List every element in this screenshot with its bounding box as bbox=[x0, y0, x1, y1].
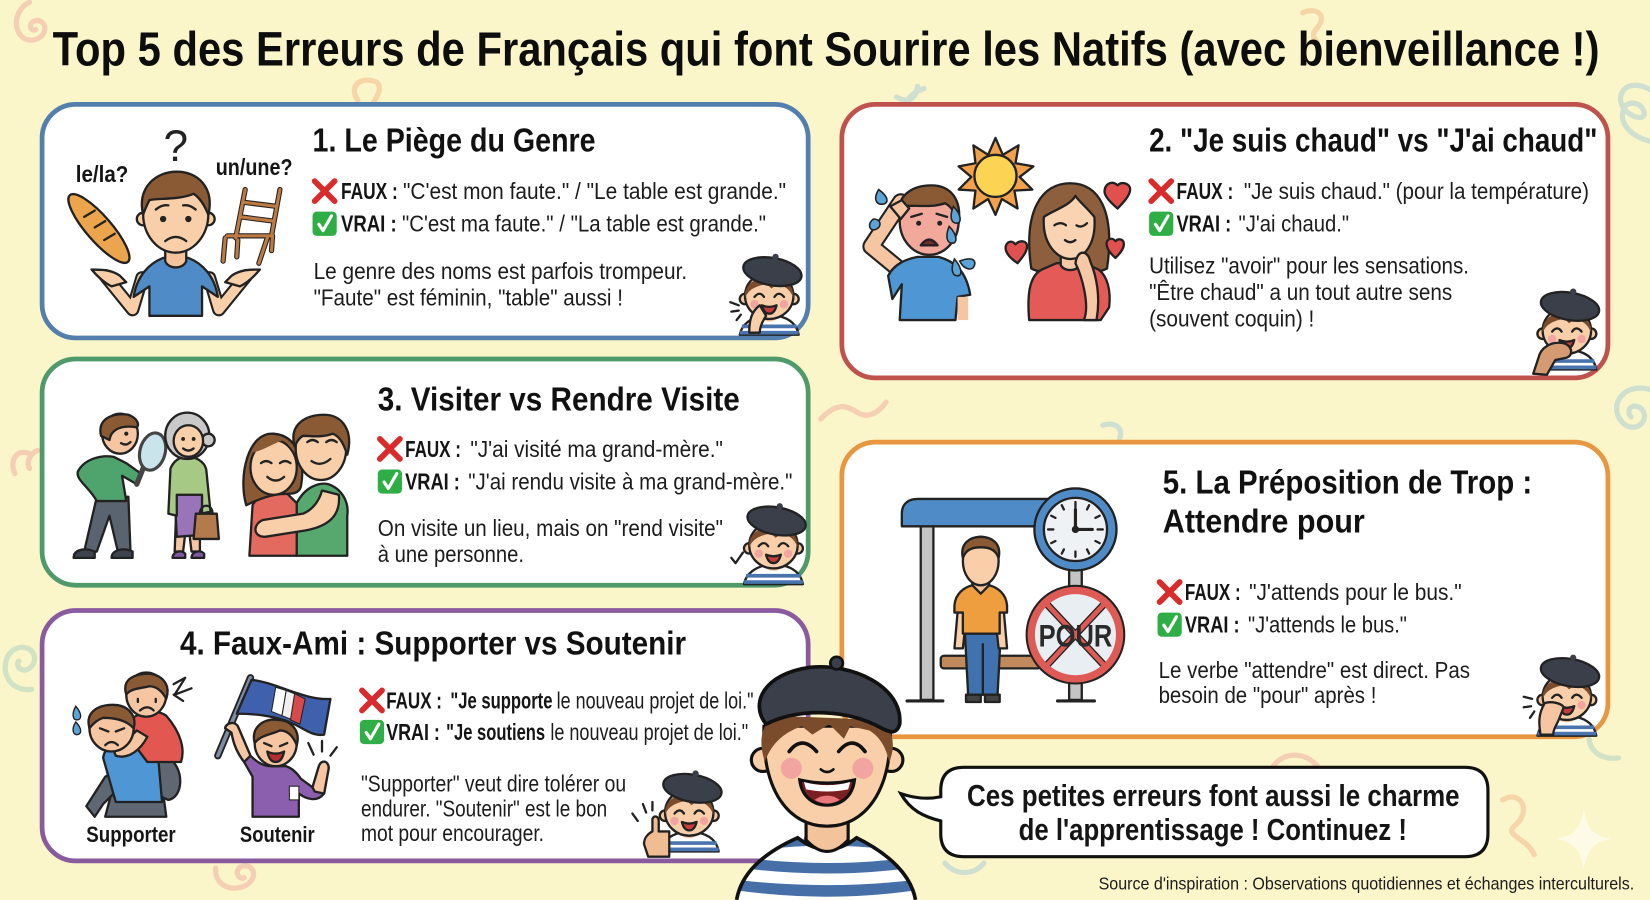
explanation: card 5: besoin de "pour" après ! bbox=[1159, 682, 1376, 708]
explanation: card 5 bbox=[1159, 657, 1470, 708]
faux row: card 5 bbox=[1160, 579, 1462, 605]
illustration: couple hugging bbox=[243, 415, 349, 556]
heading: card 5: Attendre pour bbox=[1163, 504, 1365, 541]
vrai row: card 2 bbox=[1149, 211, 1349, 237]
illustration: confused man with baguette and chair: ? bbox=[163, 122, 188, 171]
panel: 5. La Préposition de Trop bbox=[842, 442, 1608, 737]
explanation: card 2: Utilisez "avoir" pour les sensations. bbox=[1149, 253, 1469, 279]
explanation: card 1: Le genre des noms est parfois trompeur. bbox=[314, 258, 687, 284]
vrai row: card 4: VRAI : bbox=[386, 719, 440, 745]
panel: 4. Faux-Ami : Supporter vs Soutenir bbox=[42, 610, 808, 861]
explanation: card 4 bbox=[361, 770, 626, 846]
faux row: card 2: "Je suis chaud." (pour la température) bbox=[1244, 178, 1589, 204]
speech bubble bbox=[901, 767, 1488, 857]
explanation: card 4: endurer. "Soutenir" est le bon bbox=[361, 796, 607, 822]
illustration: hot sweating boy bbox=[870, 185, 975, 320]
vrai row: card 5: VRAI : bbox=[1185, 612, 1240, 638]
faux row: card 3: "J'ai visité ma grand-mère." bbox=[470, 436, 723, 462]
illustration: confused man with baguette and chair: un/une? bbox=[216, 154, 293, 180]
icon: crossed-out POUR sign bbox=[1027, 586, 1124, 684]
illustration: blushing girl with hearts bbox=[1006, 183, 1130, 320]
mini character: card 5 bbox=[1524, 654, 1601, 736]
panel: 3. Visiter vs Rendre Visite bbox=[42, 359, 808, 585]
explanation: card 2: "Être chaud" a un tout autre sens bbox=[1149, 279, 1452, 305]
explanation: card 4: mot pour encourager. bbox=[361, 820, 544, 846]
faux row: card 3: FAUX : bbox=[405, 436, 461, 462]
speech bubble: de l'apprentissage ! Continuez ! bbox=[1019, 813, 1407, 847]
speech bubble: Ces petites erreurs font aussi le charme bbox=[967, 779, 1460, 813]
faux row: card 4: FAUX : bbox=[386, 687, 442, 713]
vrai row: card 4: le nouveau projet de loi." bbox=[550, 719, 748, 745]
vrai row: card 5: "J'attends le bus." bbox=[1248, 612, 1407, 638]
label: Soutenir: Soutenir bbox=[240, 822, 315, 847]
explanation: card 1 bbox=[314, 258, 687, 310]
faux row: card 4 bbox=[362, 687, 753, 713]
panel: 2. Je suis chaud vs J'ai chaud bbox=[842, 104, 1608, 378]
faux row: card 1: FAUX : bbox=[341, 178, 398, 204]
faux row: card 3 bbox=[380, 436, 723, 462]
icon: clock bbox=[1034, 488, 1116, 570]
illustration: confused man with baguette and chair: le/la? bbox=[76, 161, 128, 187]
vrai row: card 1: "C'est ma faute." / "La table est grande." bbox=[402, 211, 766, 237]
heading: card 5 bbox=[1163, 465, 1532, 541]
heading: card 1: 1. Le Piège du Genre bbox=[313, 123, 596, 160]
explanation: card 2 bbox=[1149, 253, 1469, 331]
explanation: card 3 bbox=[378, 515, 723, 567]
vrai row: card 3: "J'ai rendu visite à ma grand-mère." bbox=[468, 468, 792, 494]
explanation: card 4: "Supporter" veut dire tolérer ou bbox=[361, 770, 626, 796]
label: Supporter: Supporter bbox=[86, 822, 176, 847]
vrai row: card 2: VRAI : bbox=[1176, 211, 1231, 237]
explanation: card 3: On visite un lieu, mais on "rend visite" bbox=[378, 515, 723, 541]
vrai row: card 1: VRAI : bbox=[341, 211, 397, 237]
explanation: card 3: à une personne. bbox=[378, 541, 524, 567]
heading: card 4: 4. Faux-Ami : Supporter vs Soutenir bbox=[180, 626, 686, 663]
illustration: soutenir — fan waving French flag bbox=[218, 678, 337, 817]
mini character: card 1 bbox=[730, 253, 804, 335]
heading: card 3: 3. Visiter vs Rendre Visite bbox=[378, 382, 740, 419]
mini character: card 4 bbox=[632, 770, 724, 857]
faux row: card 2: FAUX : bbox=[1176, 178, 1233, 204]
vrai row: card 3: VRAI : bbox=[405, 468, 460, 494]
icon: crossed-out POUR sign: POUR bbox=[1039, 617, 1112, 653]
explanation: card 5: Le verbe "attendre" est direct. Pas bbox=[1159, 657, 1470, 683]
faux row: card 4: "Je supporte bbox=[450, 687, 553, 713]
heading: card 5: 5. La Préposition de Trop : bbox=[1163, 465, 1532, 502]
vrai row: card 4 bbox=[360, 719, 748, 745]
panel: 1. Le Piège du Genre bbox=[42, 104, 808, 338]
illustration: confused man with baguette and chair bbox=[60, 122, 293, 316]
mascot: laughing man with beret and striped shirt bbox=[737, 657, 915, 900]
icon: sun bbox=[959, 138, 1033, 215]
faux row: card 1: "C'est mon faute." / "Le table est grande." bbox=[403, 178, 786, 204]
mini character: card 3 bbox=[731, 502, 808, 584]
illustration: man inspecting grandmother with magnifying glass bbox=[74, 413, 219, 558]
faux row: card 5: "J'attends pour le bus." bbox=[1249, 579, 1462, 605]
mini character: card 2 bbox=[1533, 288, 1601, 375]
vrai row: card 4: "Je soutiens bbox=[446, 719, 545, 745]
faux row: card 5: FAUX : bbox=[1185, 579, 1241, 605]
vrai row: card 2: "J'ai chaud." bbox=[1239, 211, 1349, 237]
illustration: supporter — man carrying another on his back bbox=[73, 673, 192, 817]
faux row: card 4: le nouveau projet de loi." bbox=[557, 687, 753, 713]
illustration: bus stop with waiting man, clock and POUR sign bbox=[902, 488, 1124, 702]
explanation: card 1: "Faute" est féminin, "table" aussi ! bbox=[314, 284, 623, 310]
explanation: card 2: (souvent coquin) ! bbox=[1149, 305, 1314, 331]
vrai row: card 5 bbox=[1158, 612, 1407, 638]
